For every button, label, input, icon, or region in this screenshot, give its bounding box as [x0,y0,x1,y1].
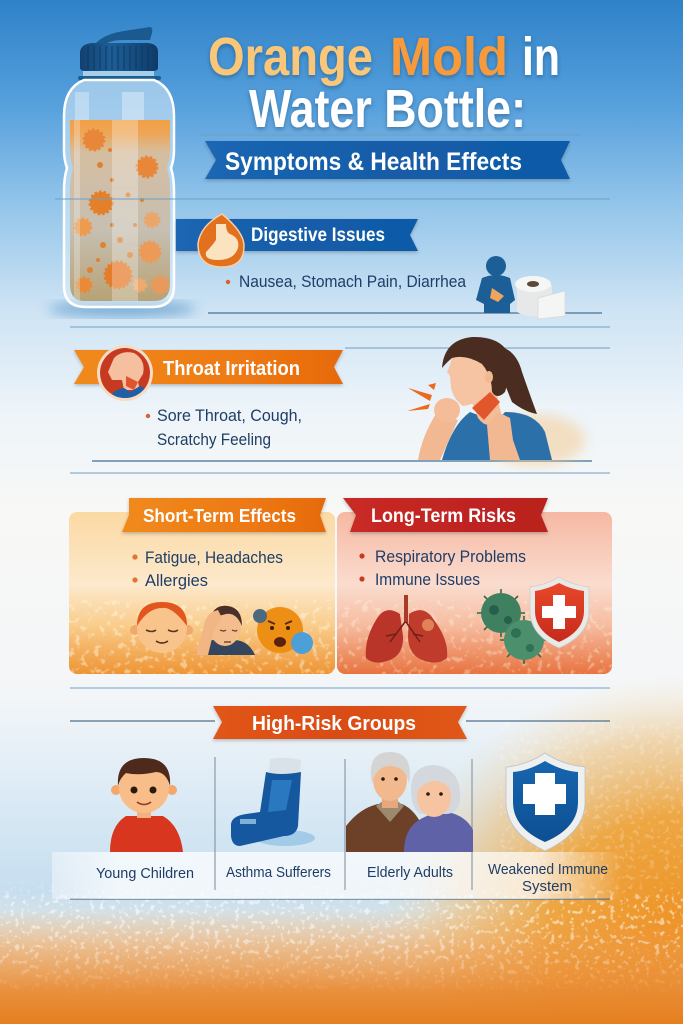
bottle cap [80,43,158,71]
icon: red shield [530,577,589,648]
illustration: woman coughing [407,337,585,466]
label: weakened immune system [488,861,608,895]
ponytail [490,345,537,414]
icon: lungs [366,595,447,663]
panel: short-term effects [69,498,335,674]
group: elderly adults [346,752,473,881]
face [447,348,498,406]
throat symptoms text [146,406,302,449]
neck [468,385,502,425]
digestive ribbon: Digestive Issues [251,225,385,246]
subtitle ribbon: Symptoms & Health Effects [225,148,522,176]
short-term list: Allergies [145,571,208,590]
panel: high-risk groups [52,706,622,899]
panel: throat irritation [74,337,585,466]
group: asthma sufferers [226,758,331,881]
throat ribbon [74,350,343,384]
icon: worried emoji [253,607,313,654]
water bottle illustration [48,27,196,317]
short-term ribbon: Short-Term Effects [143,506,296,526]
throat symptoms text: Sore Throat, Cough, [157,406,302,425]
long-term list: Respiratory Problems [375,547,526,566]
label: elderly adults: Elderly Adults [367,864,453,881]
illustration: inhaler [231,758,315,846]
rule lines [55,135,610,899]
irritated neck [472,392,500,420]
throat ribbon: Throat Irritation [163,358,300,380]
throat symptoms text: Scratchy Feeling [157,430,271,449]
high-risk ribbon: High-Risk Groups [252,713,416,735]
shirt [442,412,552,460]
label: asthma sufferers: Asthma Sufferers [226,864,331,881]
label: young children: Young Children [96,865,194,882]
label strip [52,852,622,899]
subtitle ribbon [205,141,570,179]
short-term ribbon [122,498,326,532]
label: weakened immune system: System [522,878,572,895]
bottle glass [64,80,174,307]
digestive ribbon [176,219,418,251]
long-term ribbon: Long-Term Risks [371,506,516,527]
panel: long-term risks [337,498,612,674]
illustration: elderly couple [346,752,473,852]
icon: toilet paper [515,276,565,319]
label: weakened immune system: Weakened Immune [488,861,608,878]
panel: digestive issues [176,214,565,319]
title [208,27,560,139]
title: Mold [390,27,508,87]
icon: person with headache [196,606,255,655]
short-term list [132,548,283,590]
long-term list: Immune Issues [375,570,480,589]
cough marks [407,383,436,411]
icon: person with stomach ache [476,256,515,313]
illustration: blue shield [506,753,585,851]
group: young children [96,758,194,882]
icon: tired face [130,602,193,653]
mold blobs [75,130,168,293]
long-term ribbon [343,498,548,532]
title: Water Bottle: [249,79,526,139]
title: Orange [208,27,373,87]
icon: throat profile [97,345,153,401]
bottle spout [95,27,152,46]
title: in [522,27,560,87]
short-term list: Fatigue, Headaches [145,548,283,567]
illustration: child [110,758,183,852]
icon: viruses [477,589,548,664]
hand on neck [487,412,520,460]
high-risk ribbon [213,706,467,739]
hair [442,337,509,396]
arm and fist [418,414,458,460]
icon: stomach [198,214,244,267]
long-term list [359,547,526,589]
digestive symptoms text: Nausea, Stomach Pain, Diarrhea [239,272,466,291]
group: weakened immune system [488,753,608,895]
